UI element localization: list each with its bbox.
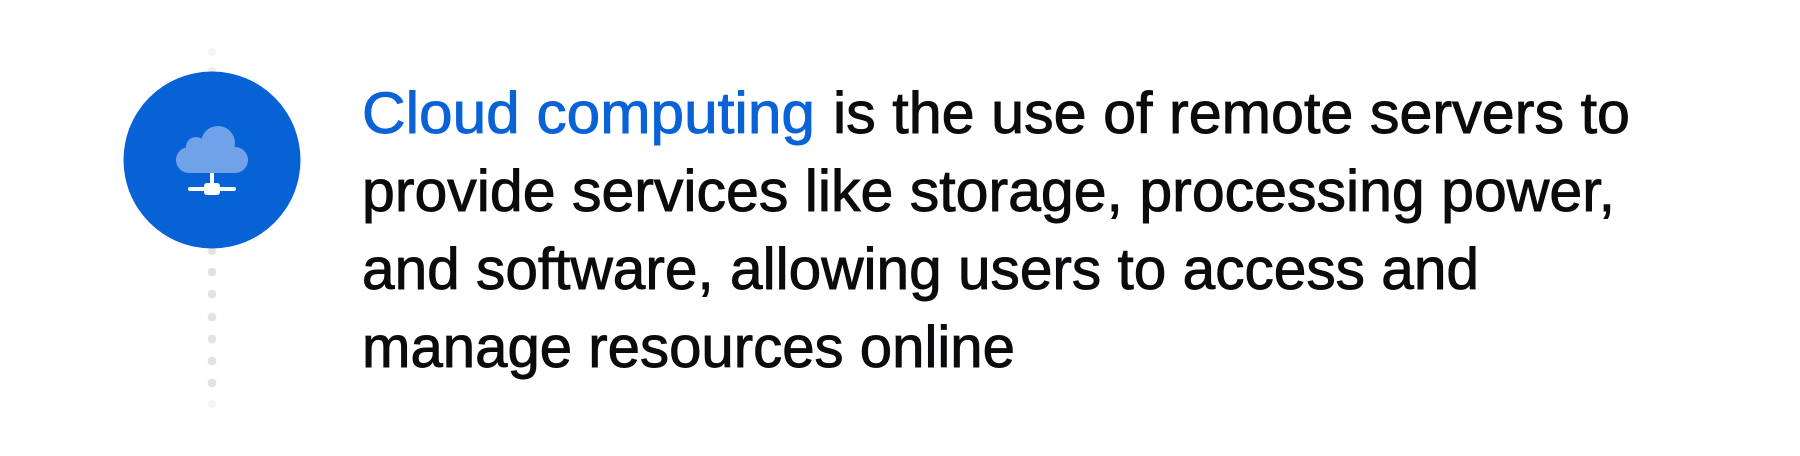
icon: network connector [188, 173, 236, 195]
text block: definition: Cloud computing [362, 81, 815, 146]
icon: blue circle with cloud network [124, 72, 300, 248]
text block: definition: and software, allowing users to access and [362, 237, 1479, 302]
icon: cloud [176, 126, 248, 173]
text block: definition: provide services like storage, processing power, [362, 159, 1615, 224]
dotted vertical line [208, 48, 216, 408]
text block: definition: is the use of remote servers to [833, 81, 1630, 146]
text block: definition: manage resources online [362, 315, 1015, 380]
text block: definition [362, 81, 1630, 380]
